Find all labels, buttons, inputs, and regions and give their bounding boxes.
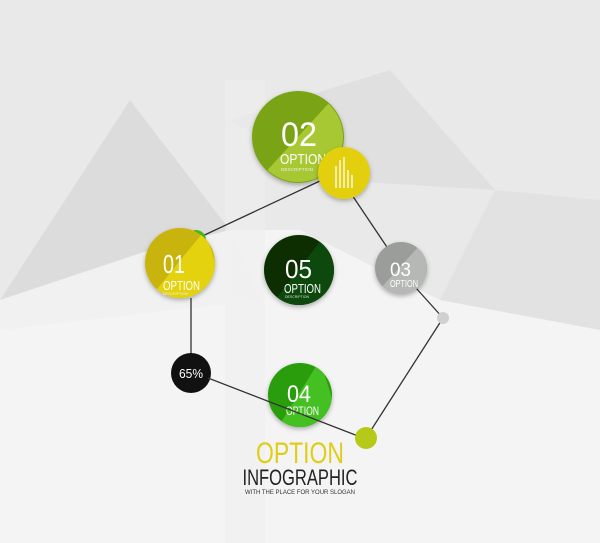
node: 01 (142, 228, 218, 303)
node: 05: 05 (285, 254, 312, 284)
title: WITH THE PLACE FOR YOUR SLOGAN (245, 489, 355, 496)
node: 03 (372, 242, 430, 298)
node: 03: 03 (390, 260, 411, 281)
node: 01: OPTION (163, 278, 200, 293)
title (242, 437, 358, 496)
node: 02 (250, 90, 346, 188)
line 65% to lime dot (208, 378, 358, 436)
icon: bar chart circle (318, 147, 370, 199)
node: 02: OPTION (280, 151, 326, 168)
node: 04: OPTION (286, 404, 319, 418)
node: 05 (262, 234, 337, 310)
node: 65% (171, 353, 211, 393)
node: 65%: 65% (179, 366, 203, 381)
node: 04: 04 (287, 381, 311, 408)
small gray dot (437, 312, 449, 324)
node: 01: 01 (163, 249, 185, 279)
title: OPTION (256, 437, 344, 470)
node: 05: OPTION (284, 281, 321, 296)
node: 01: DESCRIPTION (163, 291, 188, 296)
node: 05: DESCRIPTION (285, 294, 309, 299)
green dot (186, 230, 206, 250)
node: 04 (266, 362, 334, 432)
node: 02: DESCRIPTION (281, 167, 313, 172)
lime dot (355, 427, 377, 449)
title: INFOGRAPHIC (242, 465, 358, 490)
connector lines (191, 180, 443, 438)
node: 02: 02 (281, 116, 317, 154)
node: 03: OPTION (390, 279, 418, 290)
